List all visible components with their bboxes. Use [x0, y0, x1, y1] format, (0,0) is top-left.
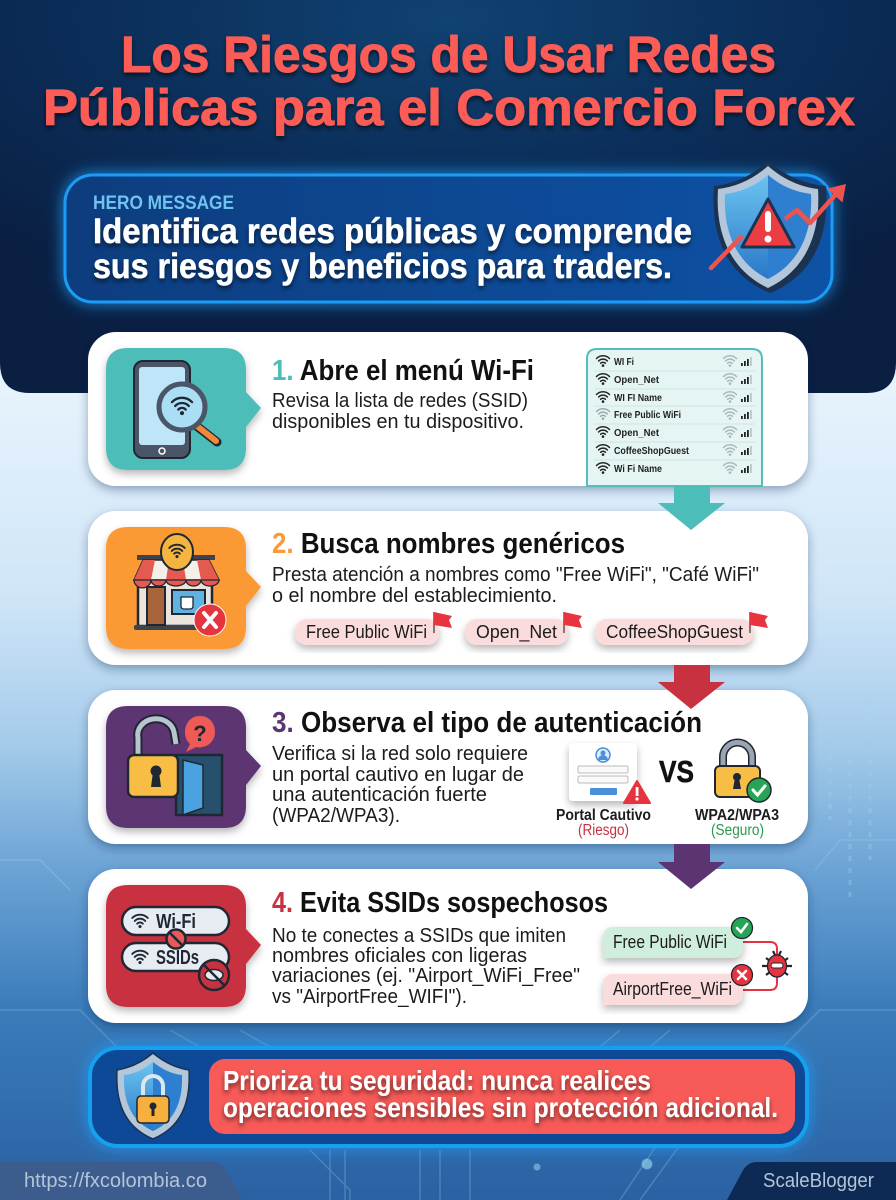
panel: step 4 — [88, 869, 808, 1023]
hero text: Identifica redes públicas y comprende — [93, 212, 692, 251]
icon tile: open padlock and door: ? — [193, 721, 207, 746]
hero text: sus riesgos y beneficios para traders. — [93, 247, 672, 286]
SSID comparison diagram — [601, 918, 792, 1005]
chip: fake network — [601, 964, 752, 1005]
chip: Open_Net — [465, 612, 582, 645]
panel: step 3 — [88, 690, 808, 844]
comparison labels: (Seguro) — [711, 822, 764, 839]
chip: legit network: Free Public WiFi — [613, 932, 727, 952]
callout message: Prioriza tu seguridad: nunca realices — [223, 1065, 651, 1096]
step 3 body — [272, 743, 528, 827]
chip: legit network — [601, 918, 752, 958]
hero text — [93, 212, 692, 286]
icon tile: wifi names blocked: SSIDs — [156, 947, 199, 969]
network rows — [596, 356, 690, 475]
icon tile: store — [106, 527, 261, 649]
step 2 body: Presta atención a nombres como "Free WiFi", "Café WiFi" — [272, 564, 759, 586]
step 4 body: No te conectes a SSIDs que imiten — [272, 925, 566, 947]
arrow: step 1 to 2 — [658, 486, 725, 530]
circuit board background pattern — [0, 700, 896, 1200]
step 3 body: (WPA2/WPA3). — [272, 805, 400, 827]
network rows: CoffeeShopGuest — [614, 446, 690, 457]
vs label: VS — [659, 754, 694, 789]
step 3 body: una autenticación fuerte — [272, 784, 487, 806]
step 1 body: Revisa la lista de redes (SSID) — [272, 390, 528, 412]
title — [43, 26, 855, 136]
title: Públicas para el Comercio Forex — [43, 79, 855, 136]
footer brand tab — [727, 1162, 896, 1200]
comparison labels: Portal Cautivo — [556, 807, 651, 824]
step 4 body: vs "AirportFree_WIFI"). — [272, 986, 467, 1008]
flagged name chips — [295, 612, 768, 645]
chip: Free Public WiFi: Free Public WiFi — [306, 622, 427, 642]
callout message: operaciones sensibles sin protección adicional. — [223, 1092, 778, 1123]
step 3 body: un portal cautivo en lugar de — [272, 764, 524, 786]
icon tile: phone search — [106, 348, 261, 470]
icon: shield with warning and rising arrow — [711, 161, 845, 293]
secure padlock illustration — [715, 742, 771, 802]
wifi network list — [587, 349, 762, 486]
chip: Free Public WiFi — [295, 612, 452, 645]
network rows: WI Fi — [614, 357, 634, 368]
step 1 heading: 1. Abre el menú Wi-Fi — [272, 355, 534, 387]
step 3 body: Verifica si la red solo requiere — [272, 743, 528, 765]
step 4 body — [272, 925, 580, 1008]
chip: fake network: AirportFree_WiFi — [613, 979, 732, 1000]
chip: CoffeeShopGuest: CoffeeShopGuest — [606, 622, 743, 642]
signal indicators — [724, 356, 752, 474]
icon tile: wifi names blocked: Wi-Fi — [156, 911, 196, 933]
network rows: Open_Net — [614, 428, 660, 439]
step 2 heading: 2. Busca nombres genéricos — [272, 528, 625, 560]
step 1 body: disponibles en tu dispositivo. — [272, 411, 524, 433]
footer source tab — [0, 1162, 243, 1200]
arrow: step 2 to 3 — [658, 665, 725, 709]
network rows: Open_Net — [614, 375, 660, 386]
portal login illustration — [569, 743, 650, 803]
connector lines — [743, 942, 777, 990]
step 4 heading: 4. Evita SSIDs sospechosos — [272, 887, 608, 919]
network rows: WI FI Name — [614, 393, 662, 404]
hero message panel — [65, 175, 832, 302]
step 2 body — [272, 564, 759, 607]
closing callout — [90, 1048, 807, 1146]
header dark panel — [0, 0, 896, 393]
comparison labels — [556, 807, 779, 839]
panel: step 1 — [88, 332, 808, 486]
footer source tab: https://fxcolombia.co — [24, 1170, 207, 1192]
comparison labels: (Riesgo) — [578, 822, 629, 839]
network rows: Free Public WiFi — [614, 410, 681, 421]
step 2 body: o el nombre del establecimiento. — [272, 585, 557, 607]
icon tile: wifi names blocked — [106, 885, 261, 1007]
icon: malware bug — [762, 951, 792, 977]
chip: CoffeeShopGuest — [595, 612, 768, 645]
icon: shield with padlock — [117, 1053, 189, 1139]
hero label: HERO MESSAGE — [93, 193, 234, 214]
step 1 body — [272, 390, 528, 433]
panel: step 2 — [88, 511, 808, 665]
title: Los Riesgos de Usar Redes — [121, 26, 776, 83]
chip: Open_Net: Open_Net — [476, 622, 557, 643]
step 4 body: variaciones (ej. "Airport_WiFi_Free" — [272, 965, 580, 987]
step 4 body: nombres oficiales con ligeras — [272, 945, 527, 967]
network rows: Wi Fi Name — [614, 464, 662, 475]
icon tile: open padlock and door — [106, 706, 261, 828]
comparison labels: WPA2/WPA3 — [695, 807, 779, 824]
footer brand tab: ScaleBlogger — [763, 1170, 874, 1192]
callout message — [209, 1059, 795, 1134]
step 3 heading: 3. Observa el tipo de autenticación — [272, 707, 702, 739]
arrow: step 3 to 4 — [658, 844, 725, 889]
